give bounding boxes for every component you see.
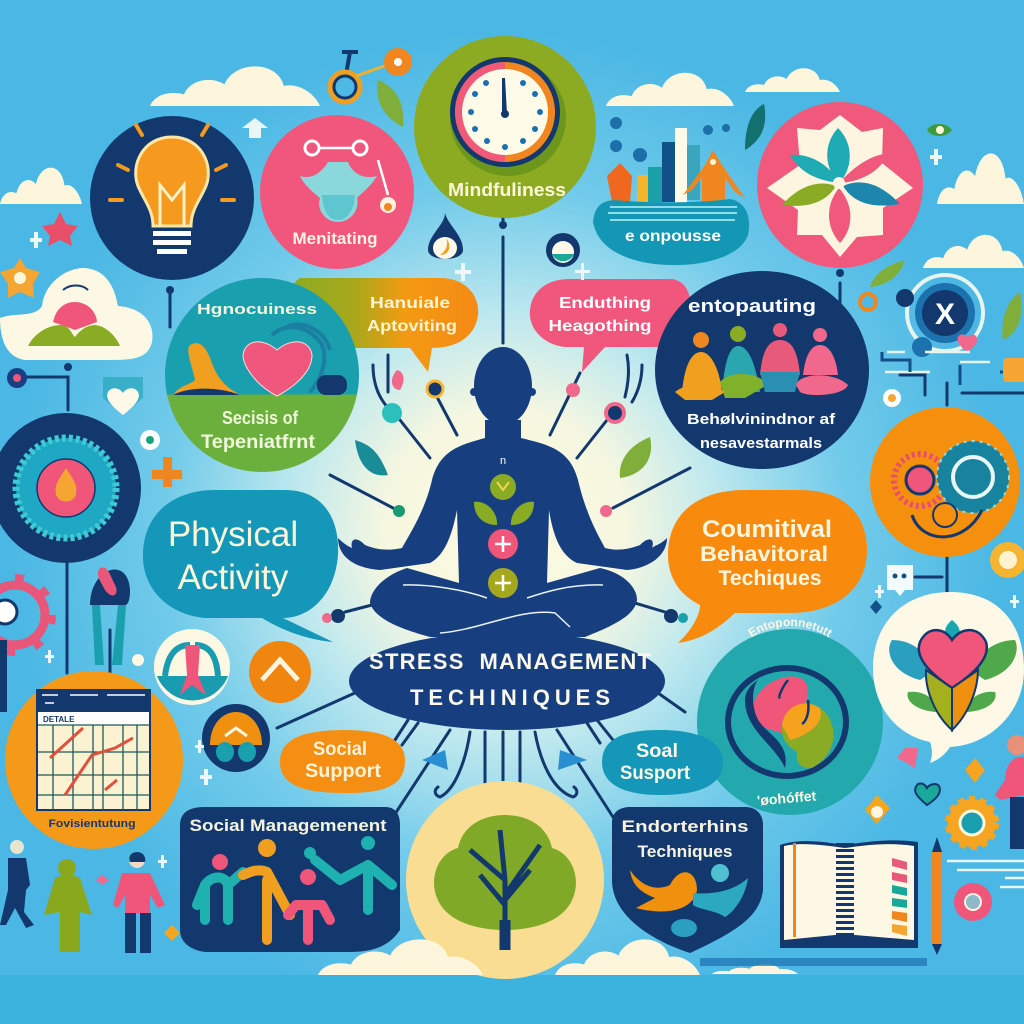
pill: social support orange: Support [305, 761, 382, 782]
panel: group meditation: Behølvinindnor af [687, 411, 836, 428]
icon: notebook [780, 837, 942, 955]
panel: endorphins: Endorterhins [622, 817, 748, 836]
bubble: orange: Aptoviting [367, 318, 457, 335]
icon: unicycle [330, 48, 412, 102]
label: meditating: Menitating [292, 229, 378, 248]
panel: group meditation: entopauting [688, 296, 816, 316]
panel: group meditation: nesavestarmals [700, 435, 822, 452]
panel: endorphins: Techniques [638, 842, 732, 861]
pill: social support orange: Social [313, 739, 367, 760]
shadow strip under notebook [700, 958, 927, 966]
icon: orange arrow circle [249, 641, 311, 703]
title: STRESS MANAGEMENT [369, 649, 652, 674]
panel: calendar [5, 671, 183, 849]
bubble: orange: Hanuiale [370, 295, 450, 312]
heart [243, 342, 312, 396]
icon: green leaf top [377, 80, 403, 127]
pill: social support orange [280, 730, 405, 793]
title plate [349, 632, 665, 730]
panel: heart bubble [873, 592, 1024, 763]
panel: calendar: Fovisientutung [48, 818, 136, 830]
panel: meditating [260, 115, 414, 269]
pill: social support teal [602, 730, 723, 795]
leaf icon [745, 104, 765, 150]
person right [995, 735, 1024, 849]
bottom band [0, 975, 1024, 1024]
bubble: orange [287, 278, 478, 372]
bubble: cognitive: Behavitoral [700, 543, 828, 566]
panel: calendar: DETALE [43, 715, 75, 724]
label: Tepeniatfrnt [201, 432, 316, 453]
icon: star pink [42, 212, 78, 246]
panel: gears orange [870, 407, 1020, 557]
label: Secisis of [222, 408, 299, 428]
small heart shield [103, 377, 143, 415]
panel: left cloud [0, 268, 153, 360]
clouds [0, 66, 1024, 268]
X icon cluster: X [935, 298, 955, 331]
pill [317, 375, 347, 395]
panel: mindfulness [414, 36, 596, 218]
label: Hgnocuiness [197, 301, 317, 318]
arrow icon top [242, 118, 268, 138]
panel: teal circle: 'øohóffet [756, 787, 817, 809]
icon: clock [450, 57, 560, 167]
bubble: cognitive: Techiques [718, 567, 822, 590]
small flower icon [140, 430, 160, 450]
panel: green circle [165, 278, 359, 472]
chakra green [488, 568, 518, 598]
girl [173, 343, 240, 395]
label: Physical [168, 515, 298, 554]
small plus icon [152, 457, 182, 487]
bubble: pink [530, 279, 692, 372]
icon: navy chevron circle [202, 704, 270, 772]
bubble: cognitive [668, 490, 867, 643]
small butterfly [990, 542, 1024, 578]
label: Activity [178, 558, 289, 597]
icon: yoga circle [154, 629, 230, 705]
panel: social management: Social Managemenent [190, 816, 387, 835]
leaf icons centre [355, 437, 651, 478]
title: TECHINIQUES [410, 685, 610, 710]
small icons mid top [428, 213, 580, 267]
panel: light bulb [90, 116, 254, 280]
bubble: physical activity [143, 490, 338, 642]
chat icon [887, 565, 913, 596]
panel: small icons left [0, 567, 130, 712]
panel: group meditation [655, 271, 869, 469]
panel: tree [406, 781, 604, 979]
small connector dots [64, 221, 844, 623]
panel: teal circle: Entoponnetutt [748, 620, 832, 638]
label: e onpousse: e onpousse [625, 228, 721, 245]
connector lines [27, 218, 1024, 817]
chakra pink [488, 529, 518, 559]
icon: star [0, 258, 40, 298]
bubble: pink: Enduthing [559, 295, 651, 312]
panel: left teal burst [0, 413, 141, 563]
X icon cluster [860, 260, 1024, 407]
pill: social support teal: Soal [636, 741, 678, 762]
panel: bar chart [593, 117, 749, 265]
bubble: cognitive: Coumitival [702, 516, 832, 543]
icon: green eye [927, 124, 952, 136]
small arrows [422, 750, 587, 770]
small diamond [870, 600, 882, 614]
bottom clouds [318, 939, 798, 975]
panel: person: n [500, 455, 506, 467]
panel: social management [180, 807, 400, 952]
white dashes right [947, 861, 1024, 887]
sparkles [30, 149, 1019, 868]
pill: social support teal: Susport [620, 763, 691, 784]
icon: gears right [865, 748, 996, 921]
panel: endorphins [612, 807, 763, 953]
bubble: pink: Heagothing [548, 318, 652, 335]
panel: teal circle [697, 620, 883, 815]
label: mindfulness: Mindfuliness [448, 180, 566, 200]
panel: flower [757, 102, 923, 268]
panel: person [338, 347, 667, 637]
people bottom left [0, 840, 180, 953]
chakra leaves [474, 502, 497, 525]
icon: bulb [110, 125, 234, 254]
small flower navy [7, 368, 27, 388]
